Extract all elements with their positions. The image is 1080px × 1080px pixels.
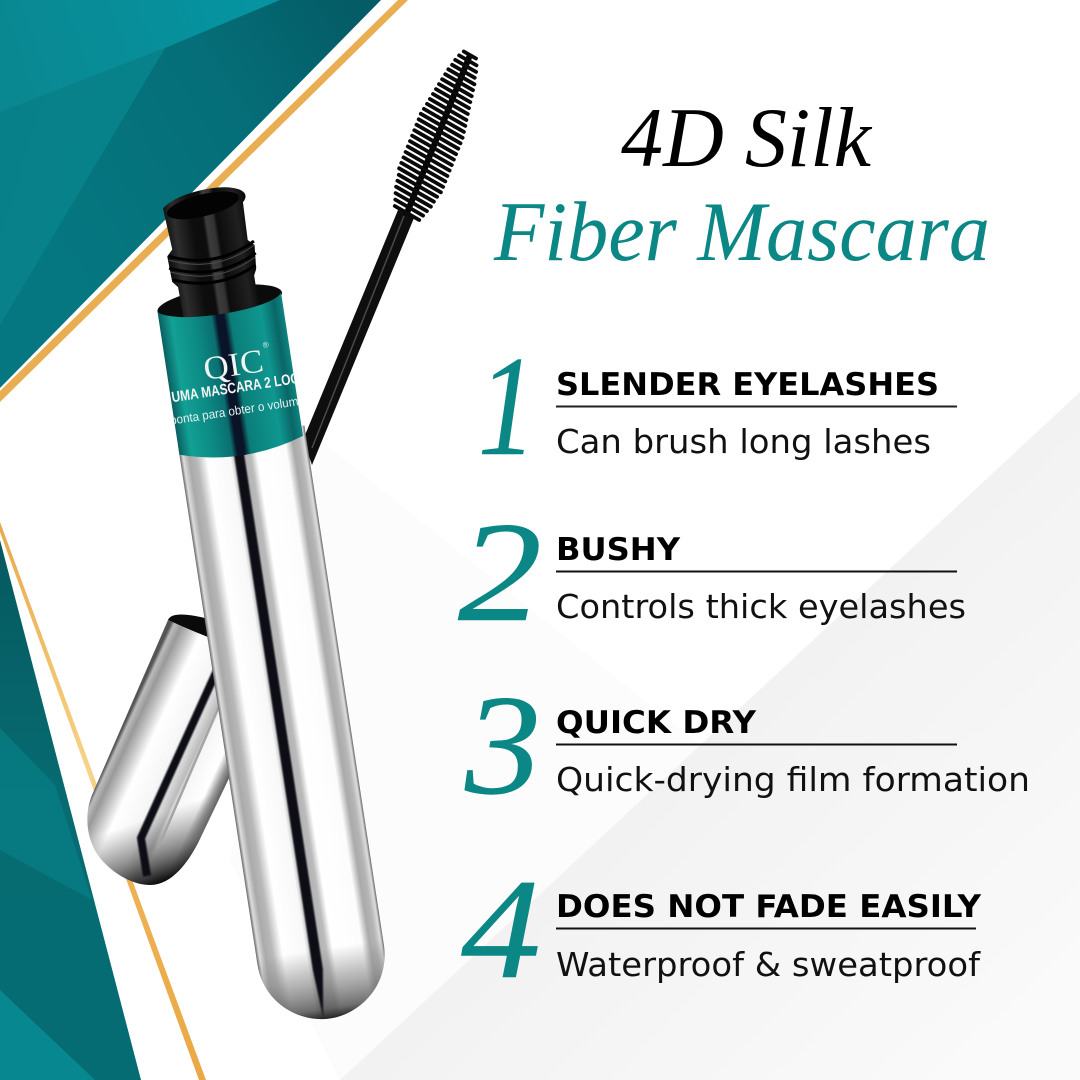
title: Fiber Mascara [493, 185, 990, 279]
tube neck [158, 183, 265, 327]
gold line bottom-left [0, 522, 206, 1080]
background: pale grey facets [230, 392, 1080, 1080]
description 3: Quick-drying film formation [556, 761, 1030, 799]
heading 3: QUICK DRY [556, 705, 757, 741]
description 4: Waterproof & sweatproof [556, 946, 982, 984]
panel: top-left teal corner [0, 0, 381, 388]
title: 4D Silk [621, 91, 872, 185]
number 4: 4 [461, 850, 541, 1008]
heading 2: BUSHY [556, 532, 681, 568]
number 2: 2 [458, 493, 542, 651]
heading 4: DOES NOT FADE EASILY [556, 889, 982, 925]
number 3: 3 [464, 666, 541, 824]
icon: mascara cap [87, 614, 229, 885]
heading 1: SLENDER EYELASHES [556, 367, 939, 403]
feature 4 [461, 850, 982, 1008]
icon: mascara wand and brush [303, 52, 476, 465]
panel: bottom-left teal corner [0, 540, 141, 1080]
number 1: 1 [478, 327, 536, 485]
feature 3 [464, 666, 1030, 824]
icon: mascara tube [157, 187, 385, 1020]
brand label: QIC [201, 343, 266, 388]
teal band: UMA MASCARA 2 LOOK [170, 369, 310, 406]
feature 2 [458, 493, 966, 651]
title [493, 91, 990, 279]
description 1: Can brush long lashes [556, 423, 931, 461]
description 2: Controls thick eyelashes [556, 588, 966, 626]
tube rim [155, 278, 284, 326]
feature 1 [478, 327, 957, 485]
teal band: ponta para obter o volume [169, 393, 306, 428]
registered mark: ® [262, 340, 269, 350]
barrel dark stripe [233, 445, 330, 1018]
teal band [158, 292, 303, 458]
gold line top-left [0, 0, 408, 402]
silver barrel [178, 426, 394, 1028]
